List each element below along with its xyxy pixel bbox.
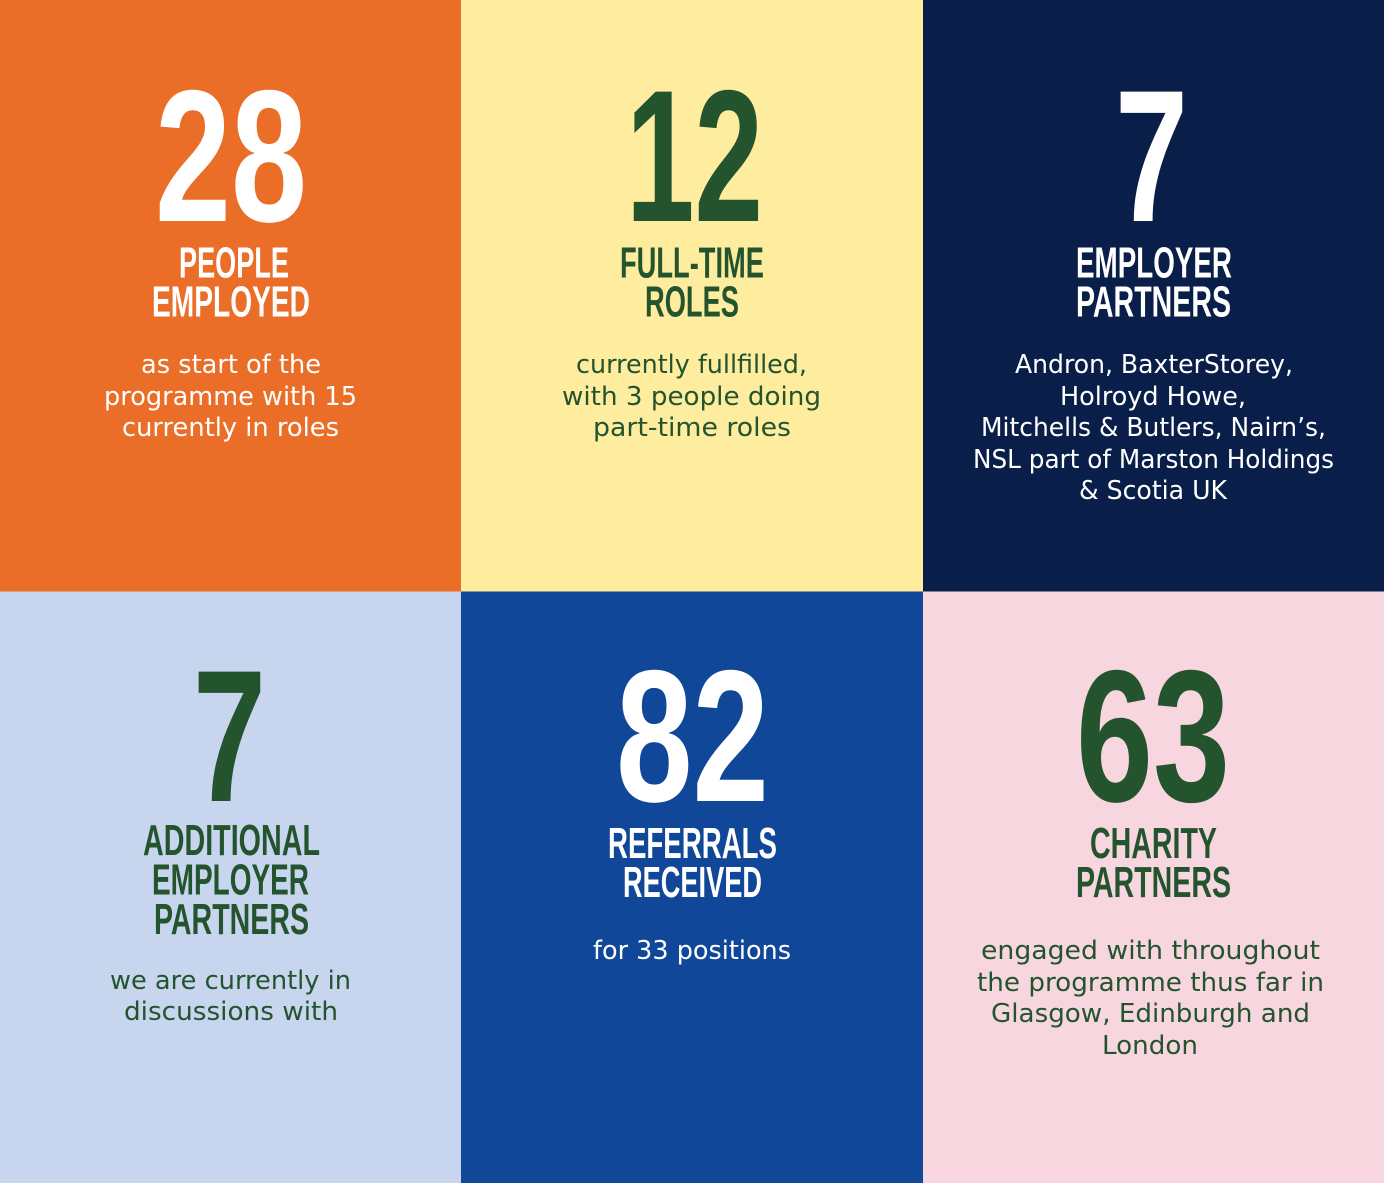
text: partner names: NSL part of Marston Holdings: [973, 445, 1334, 475]
text: role details: part-time roles: [593, 413, 791, 443]
text: programme note: as start of the: [141, 350, 321, 380]
text: partner names: Andron, BaxterStorey,: [1015, 350, 1293, 380]
number: 63: 63: [1076, 631, 1230, 841]
heading: additional employer partners: EMPLOYER: [152, 856, 309, 904]
text: partner names: Holroyd Howe,: [1060, 382, 1246, 412]
text: programme note: [104, 350, 357, 443]
panel: employer partners: [923, 0, 1384, 592]
heading: additional employer partners: ADDITIONAL: [143, 817, 320, 865]
text: discussions note: discussions with: [124, 997, 338, 1027]
number: 82: 82: [616, 631, 769, 841]
panel: full-time roles: [461, 0, 923, 592]
heading: charity partners: CHARITY: [1090, 820, 1217, 868]
heading: full-time roles: [620, 240, 764, 326]
panel: charity partners: [923, 592, 1384, 1183]
text: locations note: engaged with throughout: [981, 936, 1320, 966]
text: partner names: & Scotia UK: [1079, 476, 1228, 506]
heading: full-time roles: ROLES: [645, 278, 739, 326]
text: discussions note: [110, 966, 351, 1027]
text: locations note: Glasgow, Edinburgh and: [991, 999, 1310, 1029]
heading: charity partners: [1076, 820, 1231, 907]
heading: employer partners: EMPLOYER: [1076, 240, 1232, 288]
heading: referrals received: [608, 820, 777, 907]
number: 7: 7: [1115, 51, 1188, 261]
number: 7: 7: [193, 631, 266, 841]
heading: employer partners: PARTNERS: [1076, 278, 1231, 326]
panel: referrals received: [461, 592, 923, 1183]
text: role details: with 3 people doing: [562, 382, 821, 412]
heading: additional employer partners: PARTNERS: [154, 896, 309, 944]
number: 12: 12: [626, 51, 763, 261]
text: programme note: programme with 15: [104, 382, 357, 412]
panel: people employed: [0, 0, 461, 592]
heading: referrals received: RECEIVED: [623, 859, 762, 907]
panel: additional employer partners: [0, 592, 461, 1183]
text: role details: [562, 350, 821, 443]
heading: full-time roles: FULL-TIME: [620, 240, 764, 288]
text: locations note: the programme thus far in: [977, 968, 1324, 998]
heading: referrals received: REFERRALS: [608, 820, 777, 868]
text: partner names: Mitchells & Butlers, Nairn’s,: [981, 413, 1326, 443]
text: locations note: [977, 936, 1324, 1061]
text: positions note: for 33 positions: [593, 936, 791, 966]
heading: people employed: PEOPLE: [179, 240, 289, 288]
text: discussions note: we are currently in: [110, 966, 351, 996]
heading: additional employer partners: [143, 817, 320, 944]
heading: people employed: EMPLOYED: [152, 278, 310, 326]
heading: employer partners: [1076, 240, 1232, 326]
text: locations note: London: [1102, 1031, 1198, 1061]
heading: charity partners: PARTNERS: [1076, 859, 1231, 907]
text: role details: currently fullfilled,: [576, 350, 807, 380]
number: 28: 28: [155, 51, 307, 261]
text: programme note: currently in roles: [122, 413, 339, 443]
text: partner names: [973, 350, 1334, 506]
heading: people employed: [152, 240, 310, 326]
